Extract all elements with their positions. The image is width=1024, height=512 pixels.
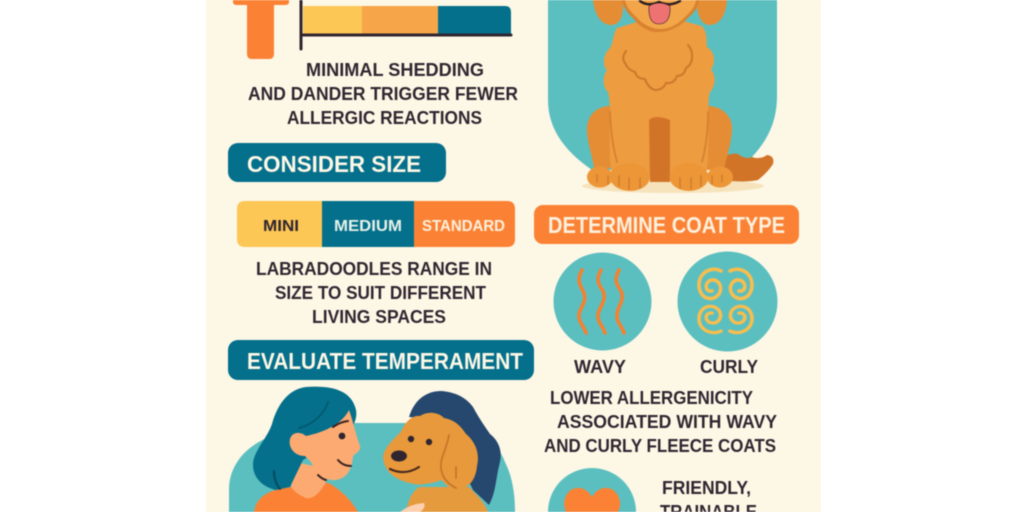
heading: evaluate temperament: EVALUATE TEMPERAMENT [247, 348, 523, 374]
icon: orange T shape [233, 0, 289, 59]
leg gap [649, 117, 670, 182]
heading: consider size: CONSIDER SIZE [247, 151, 421, 177]
heading: determine coat type: DETERMINE COAT TYPE [548, 212, 785, 238]
icon: curly coat [678, 252, 778, 352]
head bottom [622, 0, 699, 32]
size scale bar [237, 201, 515, 247]
paws [587, 163, 733, 191]
text: size note: SIZE TO SUIT DIFFERENT [275, 283, 486, 303]
tongue [649, 3, 670, 24]
size scale bar: MINI [263, 218, 299, 235]
haunches [587, 106, 640, 168]
haunch creases [610, 112, 708, 162]
text: coat note: ASSOCIATED WITH WAVY [557, 412, 777, 432]
text: temperament note: FRIENDLY, [662, 478, 751, 498]
scene backdrop [229, 423, 515, 512]
text: coat note: AND CURLY FLEECE COATS [544, 436, 776, 456]
text: shedding note: ALLERGIC REACTIONS [287, 108, 482, 128]
text: shedding note [248, 60, 518, 128]
dog friend [383, 391, 501, 512]
label: wavy: WAVY [574, 357, 626, 377]
text: shedding note: MINIMAL SHEDDING [306, 60, 484, 80]
text: size note: LABRADOODLES RANGE IN [256, 259, 492, 279]
illustration: sitting labradoodle [548, 0, 777, 193]
mouth [640, 1, 680, 4]
woman [253, 387, 360, 512]
ears [593, 0, 623, 25]
illustration: woman with dog [229, 387, 515, 512]
text: size note: LIVING SPACES [312, 307, 446, 327]
label: curly: CURLY [700, 357, 758, 377]
text: coat note [544, 388, 777, 456]
size scale bar: MEDIUM [334, 218, 402, 235]
backdrop blob [548, 0, 777, 170]
ground shadow [582, 179, 764, 193]
text: size note [256, 259, 492, 327]
heading: determine coat type [534, 205, 799, 244]
tail [718, 154, 773, 182]
chest ruff [623, 45, 692, 90]
text: shedding note: AND DANDER TRIGGER FEWER [248, 84, 518, 104]
heading: consider size [228, 143, 446, 182]
bar chart: shedding levels [301, 0, 511, 49]
heading: evaluate temperament [228, 340, 534, 380]
text: temperament note [660, 478, 757, 512]
size scale bar: STANDARD [422, 218, 505, 235]
icon: wavy coat [554, 252, 652, 350]
body [604, 15, 715, 175]
text: coat note: LOWER ALLERGENICITY [550, 388, 753, 408]
icon: heart [548, 468, 636, 512]
